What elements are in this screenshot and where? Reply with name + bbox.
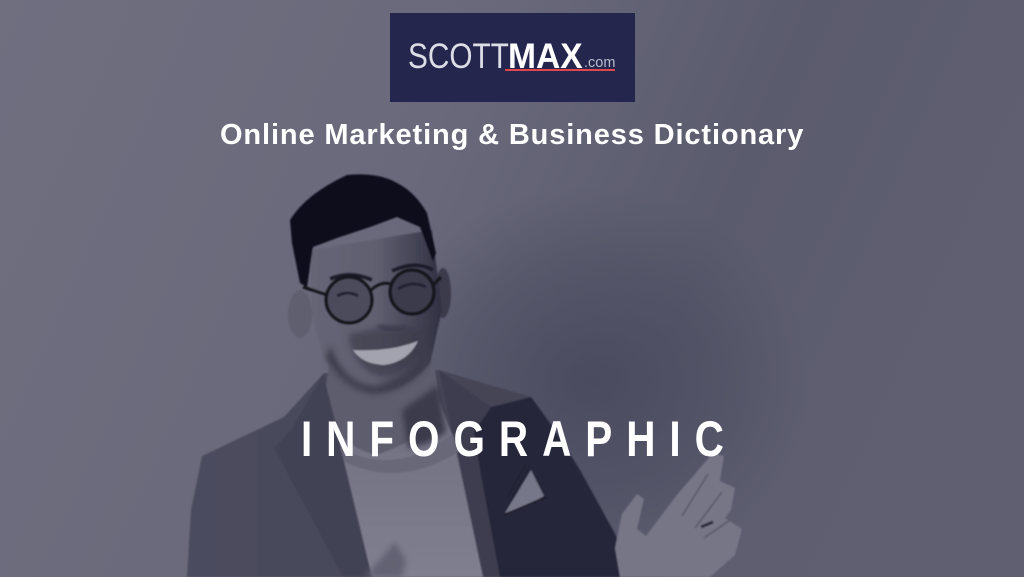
logo wordmark: SCOTT [408, 37, 509, 76]
title: INFOGRAPHIC [301, 411, 738, 467]
beard shading [326, 345, 428, 394]
nose shadow [378, 325, 406, 330]
head [288, 174, 451, 394]
logo panel [390, 13, 635, 102]
mouth [349, 328, 424, 376]
subtitle heading: Online Marketing & Business Dictionary [220, 119, 804, 151]
logo wordmark: .com [584, 55, 615, 71]
logo wordmark [408, 37, 615, 76]
ears [288, 290, 312, 338]
eyebrows [330, 265, 433, 280]
right side of jacket [474, 397, 620, 577]
blurred hand [365, 542, 406, 577]
hair [290, 174, 436, 287]
waving hand [615, 453, 742, 577]
face [310, 230, 442, 393]
pocket square [505, 470, 544, 513]
glasses [326, 277, 372, 323]
logo wordmark: MAX [508, 37, 583, 76]
left lapel [274, 373, 372, 577]
jacket and shirt [187, 350, 742, 577]
t-shirt [339, 404, 484, 577]
right lapel [439, 370, 500, 577]
neck [326, 368, 438, 454]
